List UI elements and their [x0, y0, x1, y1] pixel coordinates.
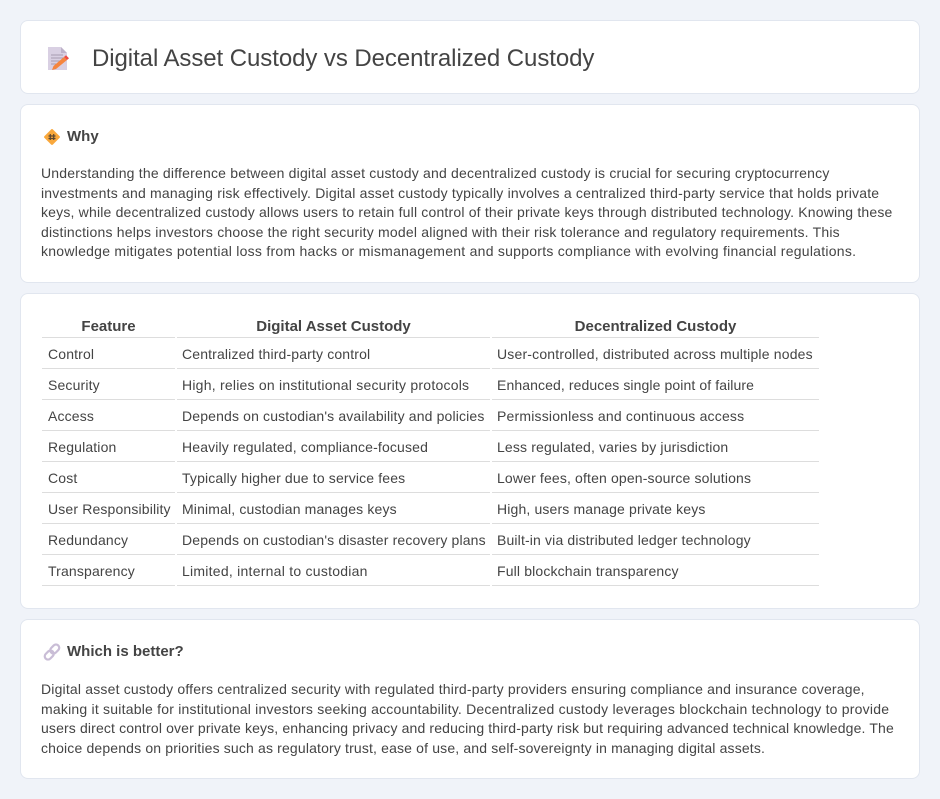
comparison table: Feature	[81, 318, 136, 335]
comparison table: Centralized third-party control	[182, 346, 370, 362]
panel: which is better	[20, 619, 920, 779]
icon: document with pencil	[48, 47, 69, 70]
comparison table: Regulation	[48, 439, 116, 455]
panel: title header	[20, 20, 920, 94]
text block: which is better: choice depends on priorities such as regulatory trust, ease of use, and self-sovereignty in managing digital assets.	[41, 740, 765, 756]
panel: why	[20, 104, 920, 283]
comparison table: High, relies on institutional security protocols	[182, 377, 469, 393]
comparison table: Typically higher due to service fees	[182, 470, 405, 486]
comparison table: Less regulated, varies by jurisdiction	[497, 439, 728, 455]
comparison table: Control	[48, 346, 94, 362]
comparison table: Transparency	[48, 563, 135, 579]
comparison table: Access	[48, 408, 94, 424]
comparison table: Limited, internal to custodian	[182, 563, 368, 579]
text block: why: keys, while decentralized custody allows users to retain full control of their private keys through distributed technology. Knowing these	[41, 204, 893, 220]
title: Digital Asset Custody vs Decentralized Custody	[92, 45, 594, 72]
comparison table: Minimal, custodian manages keys	[182, 501, 397, 517]
comparison table: Heavily regulated, compliance-focused	[182, 439, 428, 455]
panel: comparison table	[20, 293, 920, 609]
text block: which is better: Digital asset custody offers centralized security with regulated third-party providers ensuring compliance and insurance coverage,	[41, 681, 865, 697]
comparison table: User-controlled, distributed across multiple nodes	[497, 346, 813, 362]
text block: which is better	[41, 681, 894, 756]
comparison table: Security	[48, 377, 100, 393]
comparison table: Decentralized Custody	[575, 318, 736, 335]
comparison table: Enhanced, reduces single point of failure	[497, 377, 754, 393]
comparison table: Permissionless and continuous access	[497, 408, 744, 424]
comparison table: Depends on custodian's availability and policies	[182, 408, 484, 424]
text block: why	[41, 165, 893, 259]
text block: why: investments and managing risk effectively. Digital asset custody typically involves a centralized third-party service that holds private	[41, 185, 879, 201]
text block: why: knowledge mitigates potential loss from hacks or mismanagement and supports compliance with evolving financial regulations.	[41, 243, 856, 259]
icon: chain link	[44, 643, 60, 661]
text block: which is better: users direct control over private keys, enhancing privacy and reducing third-party risk but requiring advanced technical knowledge. The	[41, 720, 894, 736]
comparison table: Built-in via distributed ledger technology	[497, 532, 751, 548]
comparison table: User Responsibility	[48, 501, 171, 517]
comparison table: Depends on custodian's disaster recovery plans	[182, 532, 486, 548]
heading: why: Why	[67, 128, 99, 145]
text block: which is better: making it suitable for institutional investors seeking accountability. Decentralized custody leverages blockchain technology to provide	[41, 701, 889, 717]
heading: which is better: Which is better?	[67, 643, 184, 660]
comparison table: High, users manage private keys	[497, 501, 706, 517]
comparison table: Digital Asset Custody	[256, 318, 411, 335]
icon: diamond sign	[44, 129, 60, 145]
comparison table	[42, 318, 819, 586]
comparison table: Full blockchain transparency	[497, 563, 679, 579]
text block: why: Understanding the difference between digital asset custody and decentralized custody is crucial for securing cryptocurrency	[41, 165, 830, 181]
comparison table: Lower fees, often open-source solutions	[497, 470, 751, 486]
comparison table: Cost	[48, 470, 77, 486]
text block: why: distinctions helps investors choose the right security model aligned with their risk tolerance and regulatory requirements. This	[41, 224, 840, 240]
comparison table: Redundancy	[48, 532, 128, 548]
